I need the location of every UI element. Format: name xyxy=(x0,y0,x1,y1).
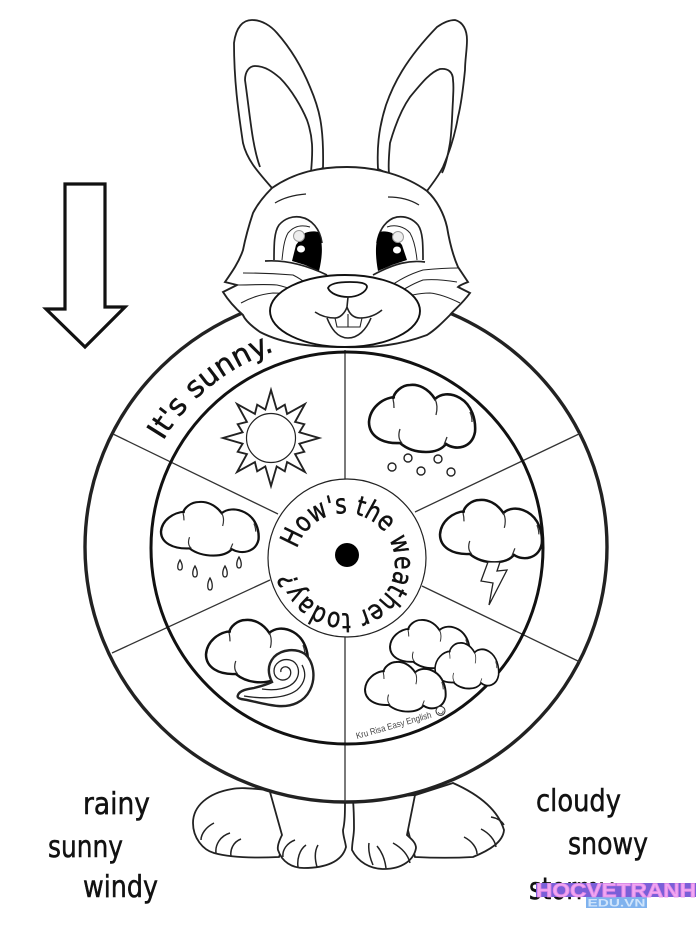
icon: smile xyxy=(435,705,446,716)
hub xyxy=(268,479,426,637)
hub text: How's the weather today? xyxy=(278,495,410,632)
word: snowy: snowy xyxy=(568,827,648,862)
outer ring xyxy=(85,292,607,802)
brows xyxy=(275,194,419,205)
whiskers xyxy=(237,268,460,303)
nose xyxy=(328,282,367,297)
icon: storm cloud xyxy=(440,500,542,605)
hub dot xyxy=(335,543,359,567)
right eye xyxy=(373,217,425,275)
left eye xyxy=(265,217,327,275)
rabbit head xyxy=(223,167,470,347)
icon: cloudy xyxy=(365,620,499,712)
word: windy: windy xyxy=(83,870,158,905)
sector dividers xyxy=(112,350,581,802)
icon: wind cloud xyxy=(206,620,313,706)
watermark: HOCVETRANH xyxy=(536,881,696,902)
rabbit feet xyxy=(193,783,504,869)
credit: Kru Risa Easy English xyxy=(355,710,433,741)
arrow xyxy=(46,184,125,347)
icon: sun xyxy=(223,390,319,486)
inner ring xyxy=(151,352,543,744)
weather wheel xyxy=(83,312,609,804)
icon: rain cloud xyxy=(161,502,259,590)
watermark xyxy=(536,881,696,910)
watermark: EDU.VN xyxy=(588,898,646,910)
word: sunny: sunny xyxy=(48,830,123,865)
word: stormy: stormy xyxy=(529,872,614,907)
mouth and teeth xyxy=(315,297,382,338)
icon: snow cloud xyxy=(369,385,475,476)
muzzle xyxy=(270,275,420,347)
word: rainy: rainy xyxy=(83,787,150,822)
word: cloudy: cloudy xyxy=(536,784,621,819)
rabbit ears xyxy=(234,20,467,191)
window text: It's sunny. xyxy=(146,338,272,439)
